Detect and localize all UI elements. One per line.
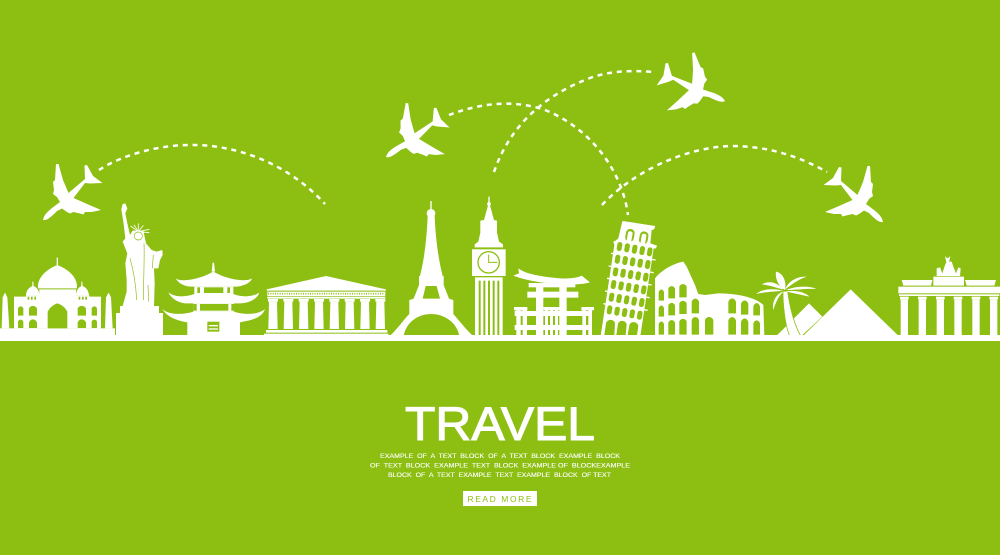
landmark: Taj Mahal (0, 258, 115, 336)
read more button: READ MORE (468, 494, 532, 504)
landmark: Big Ben (472, 197, 506, 336)
icon: palm tree (756, 272, 817, 336)
landmark: Leaning Tower of Pisa (601, 221, 657, 336)
icon: airplane left (43, 164, 102, 220)
icon: airplane right (824, 166, 883, 222)
landmark: Statue of Liberty (116, 203, 163, 336)
icon: airplane centre (386, 101, 452, 164)
landmark: torii gate (513, 268, 594, 335)
title: TRAVEL (405, 398, 595, 451)
text block: BLOCK OF A TEXT EXAMPLE TEXT EXAMPLE BLOCK OF TEXT (388, 472, 611, 479)
landmark: Eiffel Tower (390, 201, 473, 336)
landmark: pagoda (162, 263, 265, 335)
landmark: Colosseum (655, 262, 764, 336)
text block: OF TEXT BLOCK EXAMPLE TEXT BLOCK EXAMPLE OF BLOCKEXAMPLE (370, 462, 630, 470)
landmark: Parthenon (264, 276, 388, 336)
icon: airplane top right (651, 48, 725, 120)
dashed flight paths (99, 71, 827, 215)
read more button (463, 491, 537, 506)
text block: EXAMPLE OF A TEXT BLOCK OF A TEXT BLOCK EXAMPLE BLOCK (380, 453, 621, 460)
landmark: pyramids (777, 289, 898, 336)
ground strip (0, 335, 1000, 341)
text block (370, 453, 630, 479)
landmark: Brandenburg Gate (898, 256, 1000, 335)
